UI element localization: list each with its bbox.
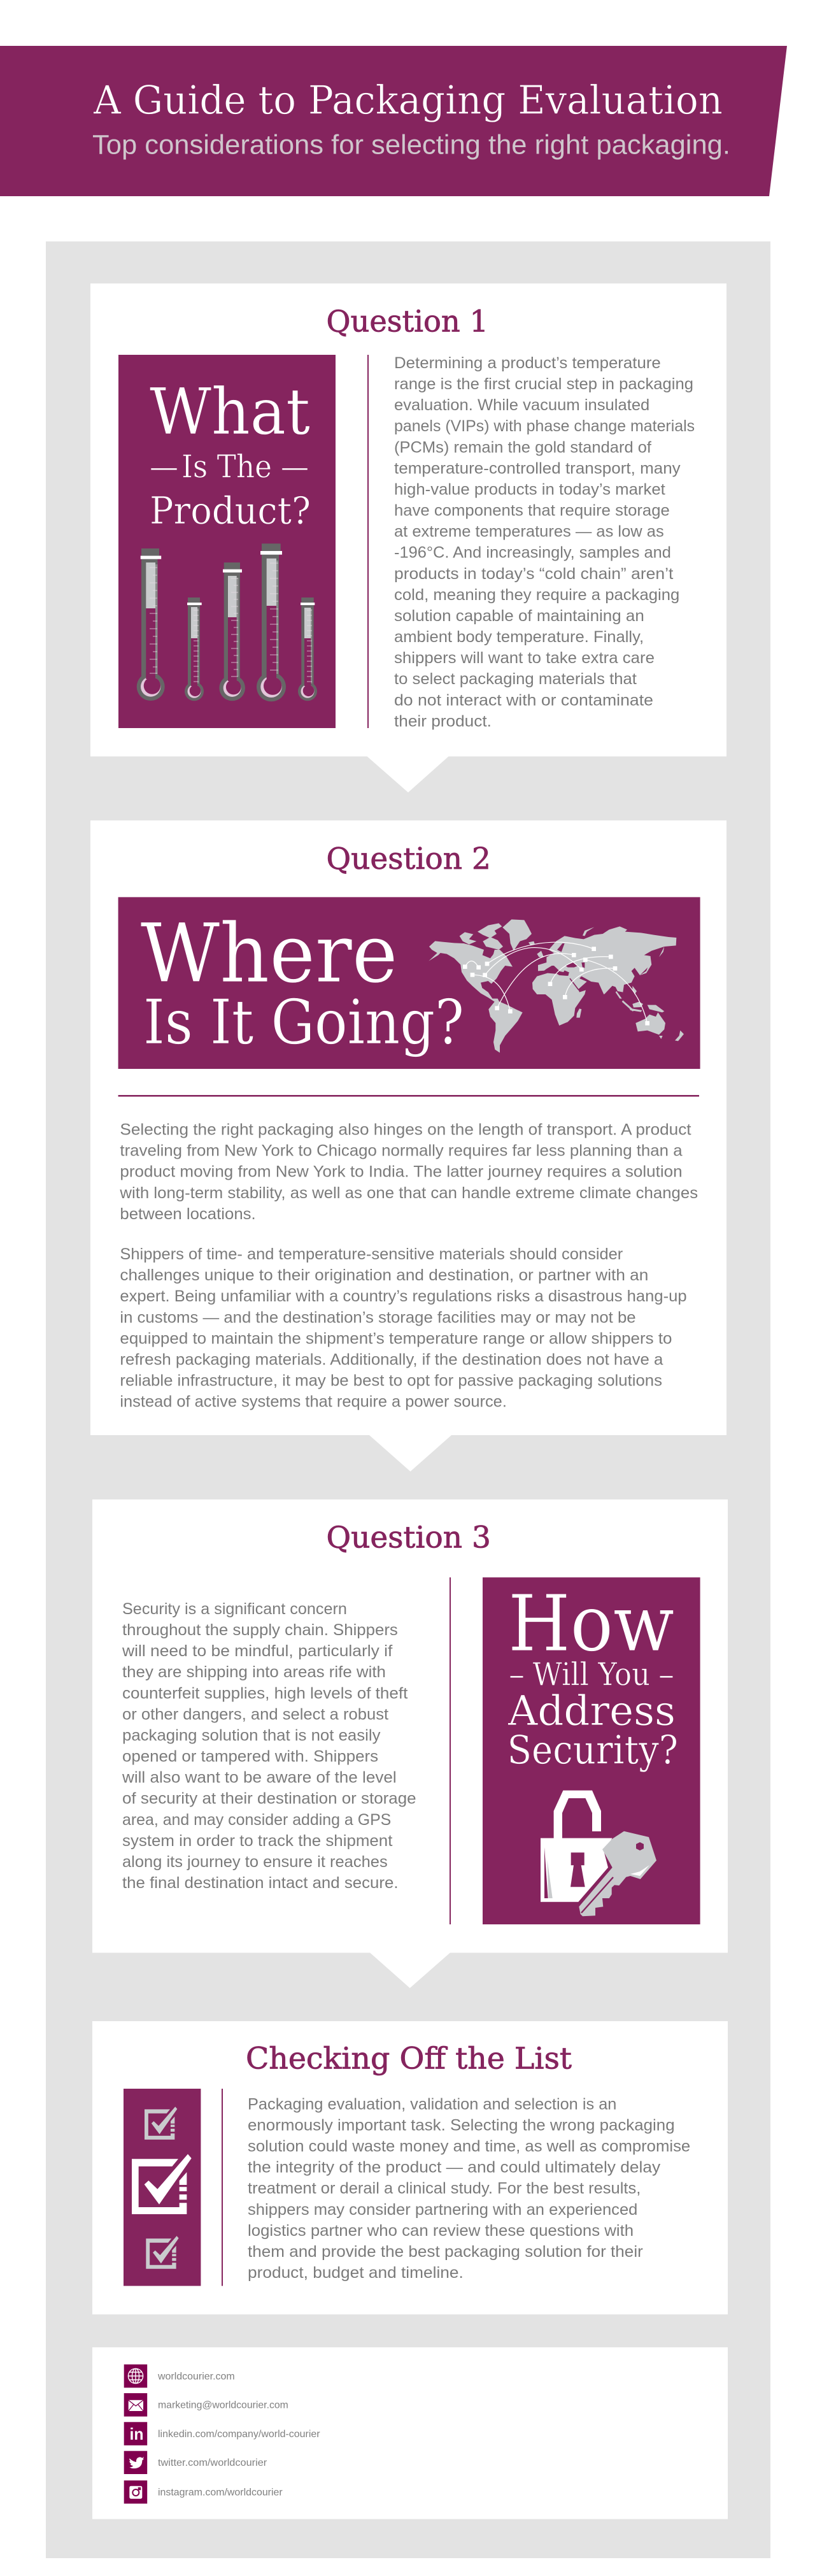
icon: envelope: [129, 2400, 143, 2411]
text block: question 3 body: will also want to be aware of the level: [122, 1769, 397, 1787]
display text: How Will You Address Security?: –: [509, 1656, 525, 1692]
heading: question 1: Question 1: [326, 304, 488, 339]
display text: What Is The Product?: Is The: [181, 448, 272, 485]
display text: How Will You Address Security?: –: [658, 1656, 674, 1692]
panel: how will you address security: [483, 1577, 700, 1924]
contact: email: [124, 2393, 288, 2417]
text block: question 1 body: range is the first crucial step in packaging: [394, 375, 693, 393]
text block: question 3 body: opened or tampered with. Shippers: [122, 1748, 378, 1766]
text block: question 3 body: [122, 1600, 416, 1892]
contact: twitter: twitter.com/worldcourier: [158, 2458, 267, 2468]
display text: How Will You Address Security?: How: [508, 1578, 674, 1669]
text block: question 2 body: product moving from New York to India. The latter journey requires a solution: [120, 1163, 683, 1181]
icon: thermometer 3: [219, 562, 245, 701]
display text: What Is The Product?: What: [150, 375, 310, 449]
text block: question 2 body: Shippers of time- and temperature-sensitive materials should consider: [120, 1245, 623, 1263]
text block: question 3 body: they are shipping into areas rife with: [122, 1663, 386, 1681]
text block: question 3 body: or other dangers, and select a robust: [122, 1705, 388, 1723]
icon: thermometer 1: [137, 548, 165, 701]
text block: question 2 body: equipped to maintain the shipment’s temperature range or allow shippers to: [120, 1329, 672, 1347]
contact: email: marketing@worldcourier.com: [158, 2400, 288, 2411]
text block: question 1 body: temperature-controlled transport, many: [394, 459, 681, 477]
text block: question 2 body: instead of active systems that require a power source.: [120, 1393, 507, 1411]
text block: question 1 body: shippers will want to take extra care: [394, 649, 655, 667]
panel: question 2: [90, 820, 726, 1471]
text block: question 1 body: evaluation. While vacuum insulated: [394, 396, 649, 414]
text block: question 2 body: reliable infrastructure, it may be best to opt for passive packaging solutions: [120, 1372, 662, 1390]
panel: what is the product: [118, 355, 336, 728]
text block: question 1 body: do not interact with or contaminate: [394, 691, 653, 709]
text block: question 1 body: -196°C. And increasingly, samples and: [394, 544, 671, 562]
display text: Where Is It Going?: [141, 906, 464, 1058]
text block: question 1 body: Determining a product’s temperature: [394, 354, 661, 372]
display text: How Will You Address Security?: Will You: [533, 1656, 650, 1692]
text block: question 2 body: refresh packaging materials. Additionally, if the destination does not have a: [120, 1350, 663, 1368]
display text: Where Is It Going?: Is It Going?: [143, 987, 464, 1058]
text block: question 1 body: at extreme temperatures — as low as: [394, 523, 664, 541]
contact: instagram: instagram.com/worldcourier: [158, 2487, 283, 2498]
text block: question 3 body: counterfeit supplies, high levels of theft: [122, 1684, 408, 1702]
text block: question 1 body: [394, 354, 695, 730]
text block: checklist body: logistics partner who can review these questions with: [248, 2222, 634, 2240]
text block: question 3 body: along its journey to ensure it reaches: [122, 1853, 388, 1871]
Africa: [532, 973, 586, 1026]
text block: question 1 body: panels (VIPs) with phase change materials: [394, 417, 695, 435]
display text: What Is The Product?: [150, 375, 311, 533]
text block: checklist body: solution could waste money and time, as well as compromise: [248, 2138, 690, 2156]
text block: checklist body: them and provide the best packaging solution for their: [248, 2243, 643, 2261]
icon: thermometer 2: [185, 597, 204, 701]
text block: question 3 body: system in order to track the shipment: [122, 1832, 392, 1850]
heading: question 2: Question 2: [326, 841, 491, 877]
text block: question 2 body: Selecting the right packaging also hinges on the length of transport. A product: [120, 1121, 691, 1139]
text block: question 1 body: ambient body temperature. Finally,: [394, 628, 644, 646]
Eurasia: [538, 926, 676, 994]
text block: question 3 body: throughout the supply chain. Shippers: [122, 1621, 398, 1639]
text block: question 3 body: packaging solution that is not easily: [122, 1726, 381, 1744]
text block: question 3 body: area, and may consider adding a GPS: [122, 1811, 391, 1829]
text block: checklist body: the integrity of the product — and could ultimately delay: [248, 2159, 661, 2177]
icon: linkedin: in: [130, 2424, 144, 2444]
contact: website: [124, 2365, 235, 2387]
contact: website: worldcourier.com: [157, 2371, 235, 2382]
South America: [488, 1002, 523, 1053]
text block: question 1 body: high-value products in today’s market: [394, 480, 665, 498]
Greenland: [502, 919, 532, 951]
text block: question 3 body: Security is a significant concern: [122, 1600, 347, 1618]
text block: checklist body: treatment or derail a clinical study. For the best results,: [248, 2180, 641, 2198]
text block: checklist body: shippers may consider partnering with an experienced: [248, 2201, 637, 2219]
text block: question 3 body: of security at their destination or storage: [122, 1790, 416, 1808]
text block: question 1 body: have components that require storage: [394, 502, 670, 520]
North America: [429, 941, 513, 1003]
text block: question 1 body: (PCMs) remain the gold standard of: [394, 438, 651, 456]
panel: grey background: [46, 241, 770, 2558]
text block: question 3 body: the final destination intact and secure.: [122, 1874, 399, 1892]
text block: question 2 body: between locations.: [120, 1205, 256, 1223]
flight routes: [465, 942, 648, 1023]
heading: checking off the list: Checking Off the List: [246, 2041, 572, 2076]
text block: checklist body: product, budget and timeline.: [248, 2264, 464, 2282]
text block: question 2 body: in customs — and the destination’s storage facilities may or may not be: [120, 1308, 636, 1326]
display text: Where Is It Going?: Where: [141, 906, 398, 1001]
text block: question 2 body: traveling from New York to Chicago normally requires far less planning than a: [120, 1142, 683, 1160]
text block: question 1 body: solution capable of maintaining an: [394, 607, 644, 625]
title: A Guide to Packaging Evaluation: [93, 76, 723, 124]
display text: How Will You Address Security?: [507, 1578, 678, 1773]
icon: globe: [128, 2368, 143, 2384]
text block: question 1 body: products in today’s “cold chain” aren’t: [394, 565, 673, 583]
contact: linkedin: linkedin.com/company/world-courier: [158, 2429, 320, 2440]
panel: question 1: [90, 283, 726, 792]
icon: thermometer 5: [298, 597, 317, 701]
display text: What Is The Product?: —: [150, 448, 178, 485]
heading: question 3: Question 3: [326, 1521, 491, 1556]
panel: contact links: [92, 2347, 728, 2519]
contact: instagram: [124, 2480, 283, 2503]
display text: What Is The Product?: Product?: [150, 489, 311, 533]
key: [579, 1831, 656, 1916]
text block: question 1 body: their product.: [394, 712, 492, 730]
subtitle: Top considerations for selecting the right packaging.: [92, 130, 730, 161]
text block: question 2 body: [119, 1121, 698, 1411]
padlock: [541, 1791, 613, 1902]
display text: What Is The Product?: —: [281, 448, 309, 485]
icon: small checkbox top: [145, 2107, 177, 2140]
text block: checklist body: [248, 2095, 690, 2282]
icon: thermometers: [137, 543, 317, 701]
panel: where is it going: [118, 897, 700, 1069]
panel: checking off the list: [92, 2021, 728, 2314]
text block: question 3 body: will need to be mindful, particularly if: [122, 1642, 392, 1660]
icon: padlock and key: [541, 1791, 656, 1916]
route markers: [463, 947, 649, 1026]
world map with routes: [429, 919, 684, 1053]
contact: linkedin: [124, 2422, 320, 2445]
text block: question 1 body: to select packaging materials that: [394, 670, 637, 688]
text block: question 2 body: with long-term stability, as well as one that can handle extreme climate changes: [119, 1184, 698, 1202]
panel: checkboxes: [124, 2089, 201, 2286]
text block: checklist body: Packaging evaluation, validation and selection is an: [248, 2095, 616, 2113]
header banner: [0, 46, 787, 196]
text block: question 1 body: cold, meaning they require a packaging: [394, 586, 679, 604]
contact: twitter: [124, 2451, 267, 2474]
Australia: [635, 1012, 665, 1034]
panel: question 3: [92, 1499, 728, 1988]
text block: checklist body: enormously important task. Selecting the wrong packaging: [248, 2116, 675, 2134]
text block: question 2 body: challenges unique to their origination and destination, or partner with an: [120, 1266, 648, 1284]
icon: thermometer 4: [257, 543, 286, 701]
display text: How Will You Address Security?: Address: [507, 1687, 676, 1735]
icon: instagram: [129, 2486, 142, 2499]
text block: question 2 body: expert. Being unfamiliar with a country’s regulations risks a disastrous hang-up: [120, 1287, 687, 1305]
icon: twitter bird: [129, 2457, 144, 2468]
icon: large checkbox: [132, 2154, 192, 2214]
display text: How Will You Address Security?: Security?: [507, 1726, 678, 1773]
icon: small checkbox bottom: [146, 2236, 179, 2269]
